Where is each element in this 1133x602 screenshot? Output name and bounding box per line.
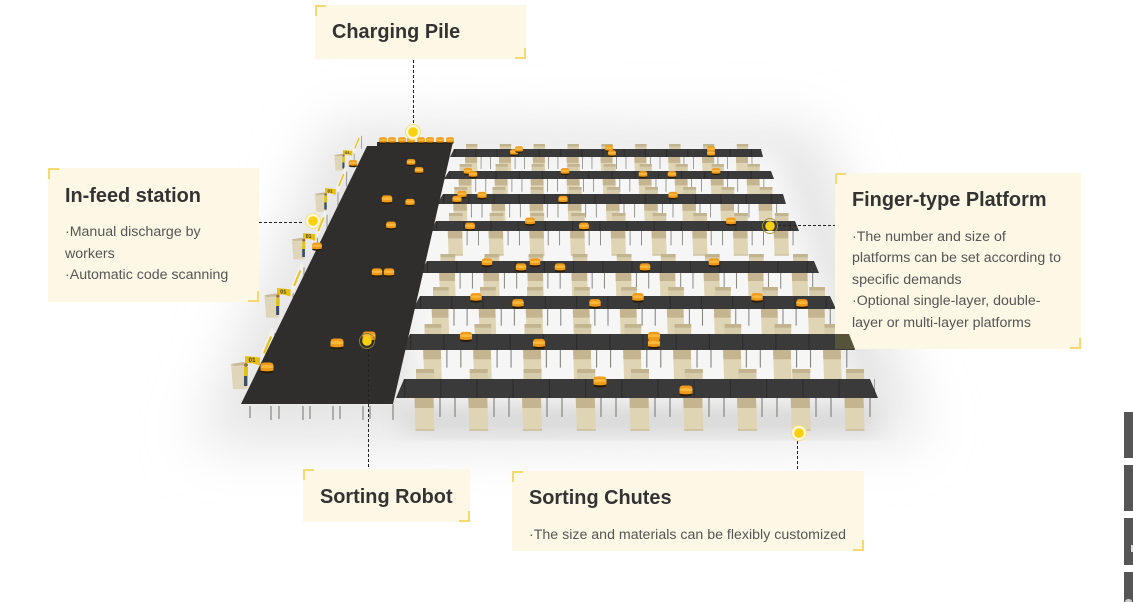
marker: finger-type platform (762, 218, 778, 234)
heading: in-feed station: In-feed station (65, 185, 201, 207)
marker: in-feed station (306, 214, 320, 228)
panel: in-feed station (48, 168, 259, 302)
row 3 (437, 187, 786, 227)
charging pile robots (379, 137, 454, 144)
row 4 (430, 213, 799, 256)
text: in-feed description: ·Automatic code scanning (65, 267, 228, 283)
sorting robots (260, 145, 808, 396)
text: platform description: layer or multi-layer platforms (852, 315, 1031, 331)
dashed leader lines (259, 60, 835, 470)
heading: charging pile: Charging Pile (332, 21, 460, 43)
heading: finger-type platform: Finger-type Platform (852, 189, 1047, 211)
heading: sorting robot: Sorting Robot (320, 486, 453, 508)
side toolbar (1124, 412, 1133, 602)
heading: sorting chutes: Sorting Chutes (529, 487, 672, 509)
marker: sorting robot (360, 334, 374, 348)
text: chutes description: ·The size and materials can be flexibly customized (529, 526, 846, 542)
text: platform description: ·The number and size of (852, 228, 1006, 244)
text: in-feed description: ·Manual discharge by (65, 224, 201, 240)
row 8 (396, 369, 878, 431)
finger-type platform rows (396, 144, 878, 431)
row 1 (450, 144, 763, 177)
text: in-feed description (65, 224, 228, 283)
text: platform description: specific demands (852, 272, 962, 288)
row 7 (402, 324, 855, 381)
row 2 (444, 164, 774, 201)
floor shadow (195, 125, 925, 445)
text: platform description: ·Optional single-layer, double- (852, 293, 1040, 309)
text: in-feed description: workers (65, 246, 115, 262)
marker: charging pile (406, 124, 420, 140)
row 6 (413, 287, 836, 338)
main sorting platform (241, 142, 453, 420)
panel: charging pile (315, 5, 526, 59)
text: platform description (852, 228, 1061, 331)
panel: finger-type platform (835, 173, 1081, 349)
marker: sorting chutes (792, 426, 806, 440)
panel: sorting robot (303, 469, 470, 522)
row 5 (420, 254, 819, 300)
text: platform description: platforms can be set according to (852, 250, 1061, 266)
panel: sorting chutes (512, 471, 864, 551)
in-feed stations (231, 132, 362, 389)
